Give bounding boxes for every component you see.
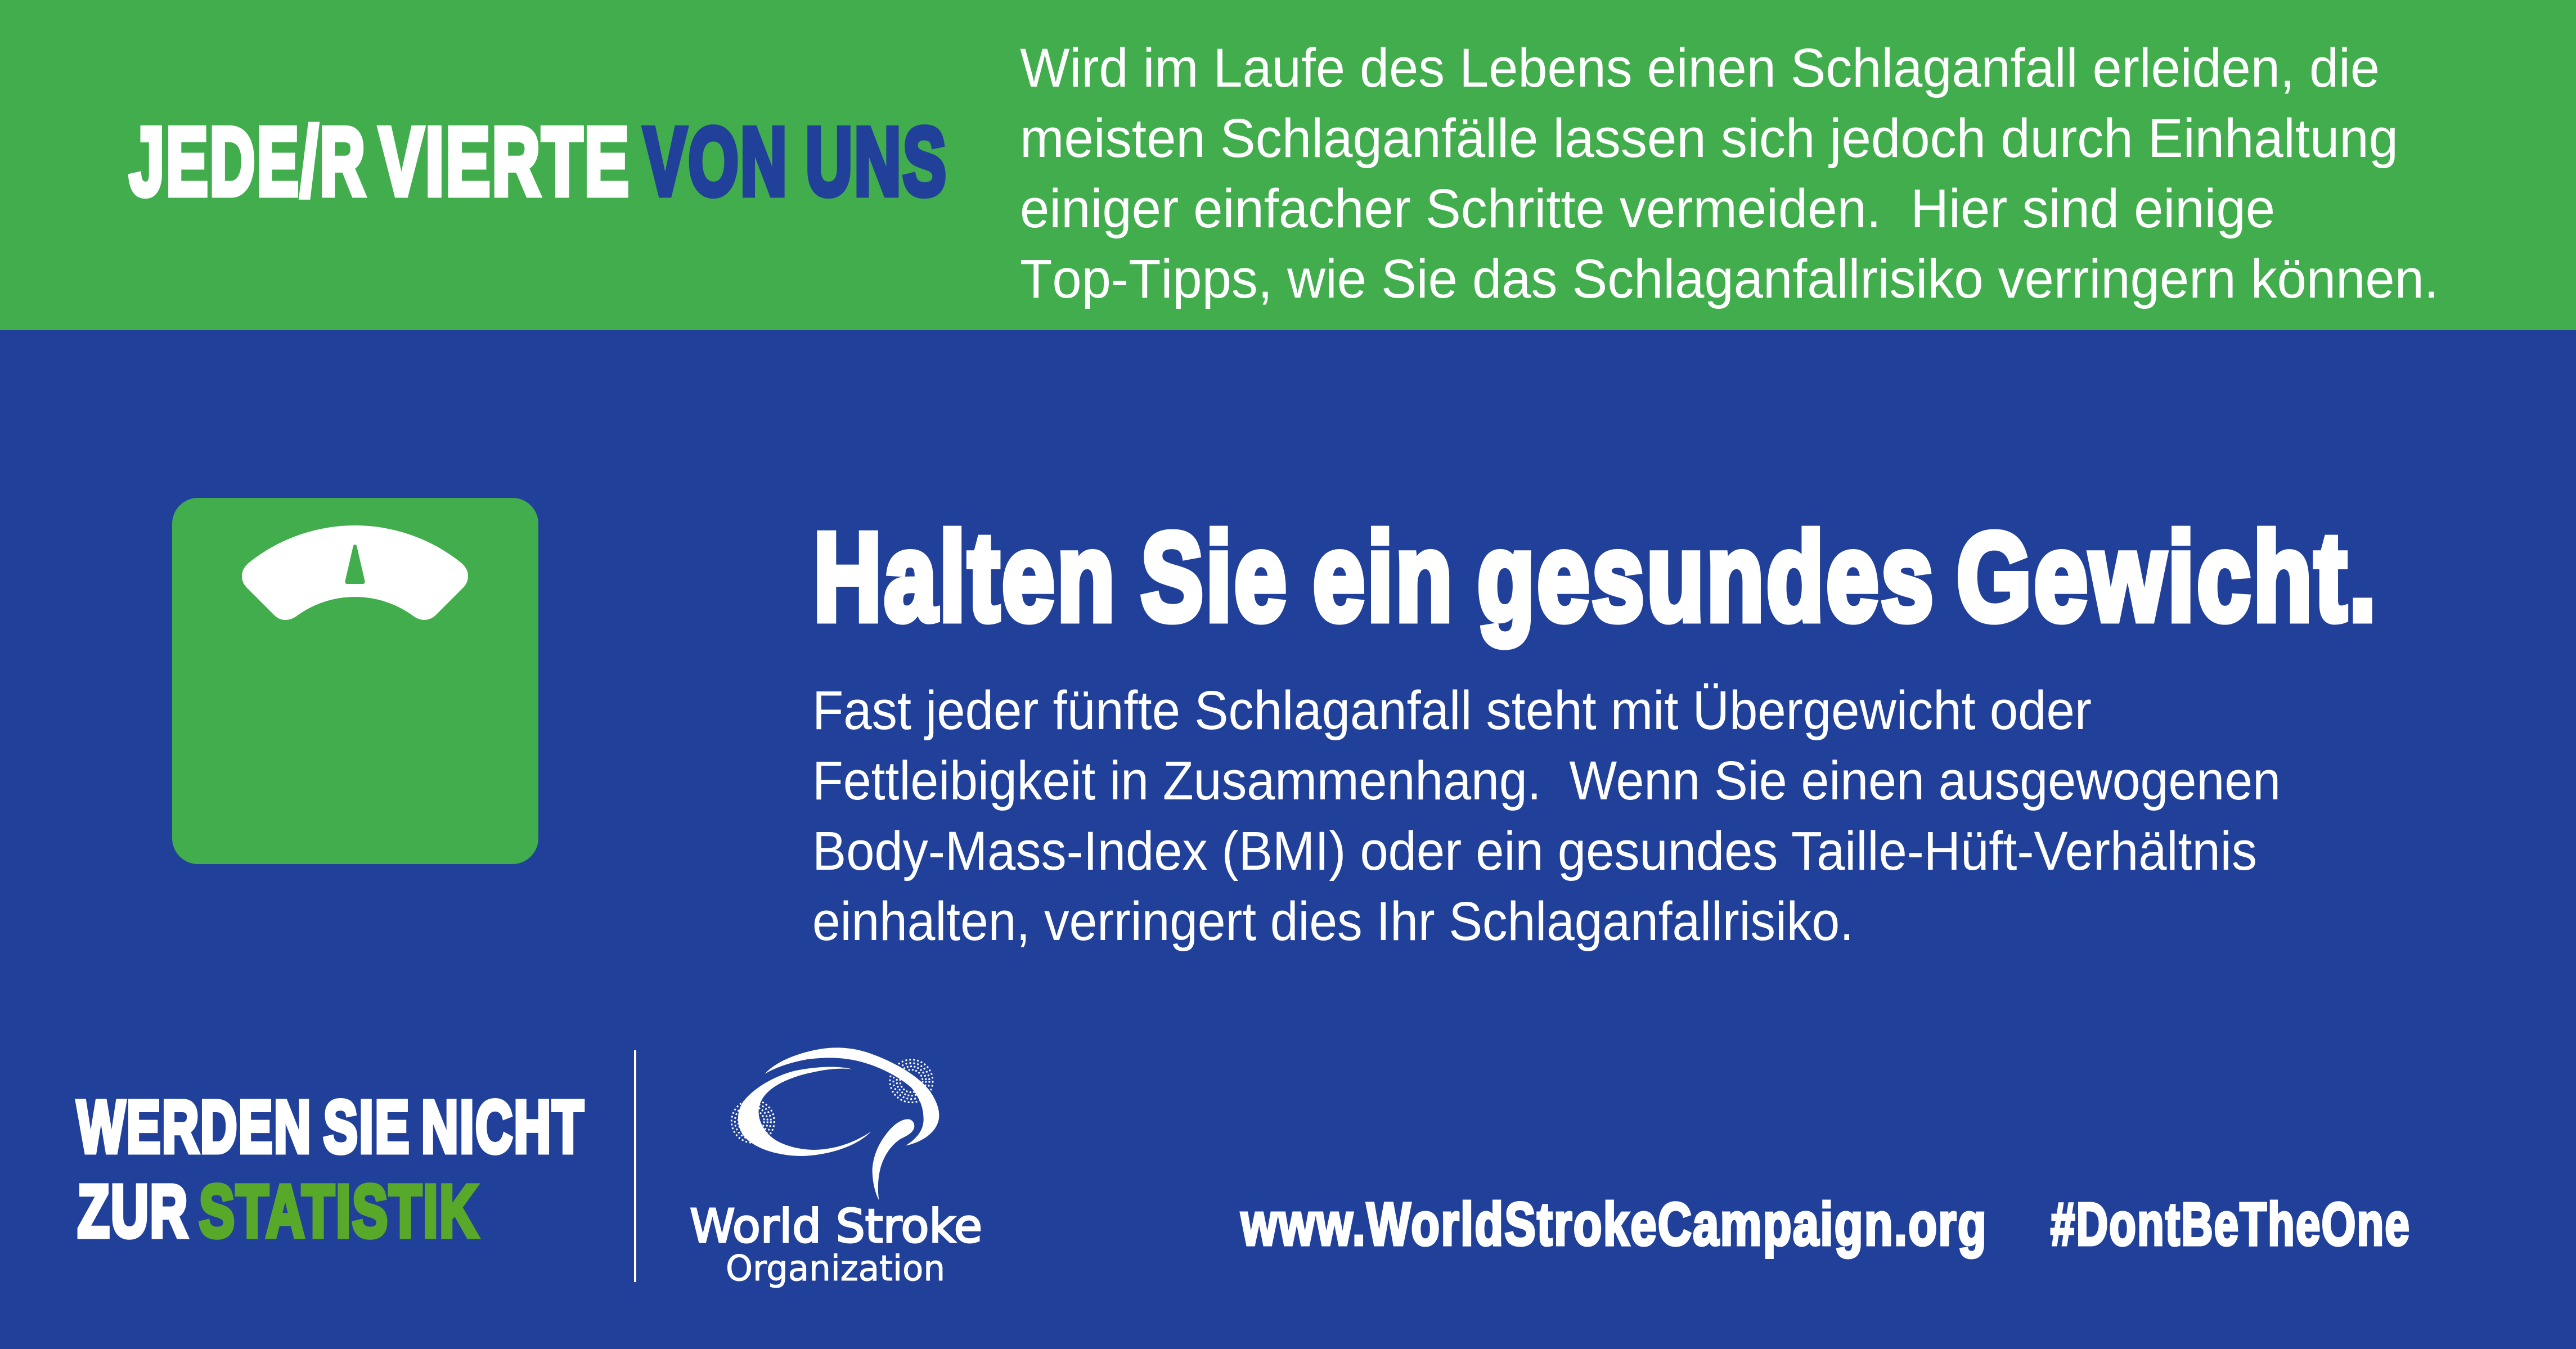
- slogan: WERDEN SIE NICHT ZUR STATISTIK: NICHT: [421, 1085, 585, 1168]
- panel: green header band: [0, 0, 2576, 330]
- text block: explanation paragraph: einhalten, verringert dies Ihr Schlaganfallrisiko.: [812, 891, 1854, 952]
- text block: explanation paragraph: [812, 680, 2281, 952]
- slogan: WERDEN SIE NICHT ZUR STATISTIK: WERDEN: [77, 1085, 312, 1168]
- slogan: WERDEN SIE NICHT ZUR STATISTIK: STATISTIK: [199, 1170, 479, 1252]
- logo wordmark: World Stroke: [690, 1200, 982, 1253]
- logo: World Stroke Organization: [690, 1047, 982, 1289]
- heading: JEDE/R VIERTE VON UNS: [129, 108, 948, 215]
- heading: main tip: Sie: [1141, 507, 1289, 647]
- logo wordmark: Organization: [726, 1248, 945, 1289]
- text block: header intro: Wird im Laufe des Lebens einen Schlaganfall erleiden, die: [1020, 37, 2380, 98]
- icon: bathroom scale: [172, 498, 538, 864]
- divider line: [634, 1050, 636, 1282]
- text block: explanation paragraph: Fast jeder fünfte Schlaganfall steht mit Übergewicht oder: [812, 680, 2092, 741]
- hashtag: #DontBeTheOne: [2051, 1190, 2411, 1258]
- text block: header intro: einiger einfacher Schritte vermeiden. Hier sind einige: [1020, 178, 2275, 239]
- heading: JEDE/R VIERTE VON UNS: VON: [644, 108, 789, 215]
- text block: header intro: [1020, 37, 2439, 309]
- slogan: WERDEN SIE NICHT ZUR STATISTIK: [77, 1085, 585, 1252]
- logo wordmark: [690, 1200, 982, 1289]
- heading: JEDE/R VIERTE VON UNS: VIERTE: [379, 108, 631, 215]
- text block: explanation paragraph: Body-Mass-Index (BMI) oder ein gesundes Taille-Hüft-Verhältnis: [812, 820, 2257, 882]
- heading: main tip: [813, 507, 2379, 647]
- heading: main tip: Halten: [813, 507, 1117, 647]
- link: campaign website: www.WorldStrokeCampaign.org: [1240, 1190, 1988, 1258]
- text block: header intro: Top-Tipps, wie Sie das Schlaganfallrisiko verringern können.: [1020, 248, 2439, 309]
- text block: explanation paragraph: Fettleibigkeit in Zusammenhang. Wenn Sie einen ausgewogenen: [812, 750, 2281, 811]
- slogan: WERDEN SIE NICHT ZUR STATISTIK: ZUR: [78, 1170, 189, 1252]
- text block: header intro: meisten Schlaganfälle lassen sich jedoch durch Einhaltung: [1020, 107, 2398, 169]
- slogan: WERDEN SIE NICHT ZUR STATISTIK: SIE: [323, 1085, 411, 1168]
- heading: main tip: Gewicht.: [1957, 507, 2379, 647]
- icon: brain and stem mark: [731, 1047, 939, 1200]
- heading: JEDE/R VIERTE VON UNS: UNS: [806, 108, 948, 215]
- heading: main tip: gesundes: [1477, 507, 1936, 647]
- heading: main tip: ein: [1313, 507, 1455, 647]
- heading: JEDE/R VIERTE VON UNS: JEDE/R: [129, 108, 367, 215]
